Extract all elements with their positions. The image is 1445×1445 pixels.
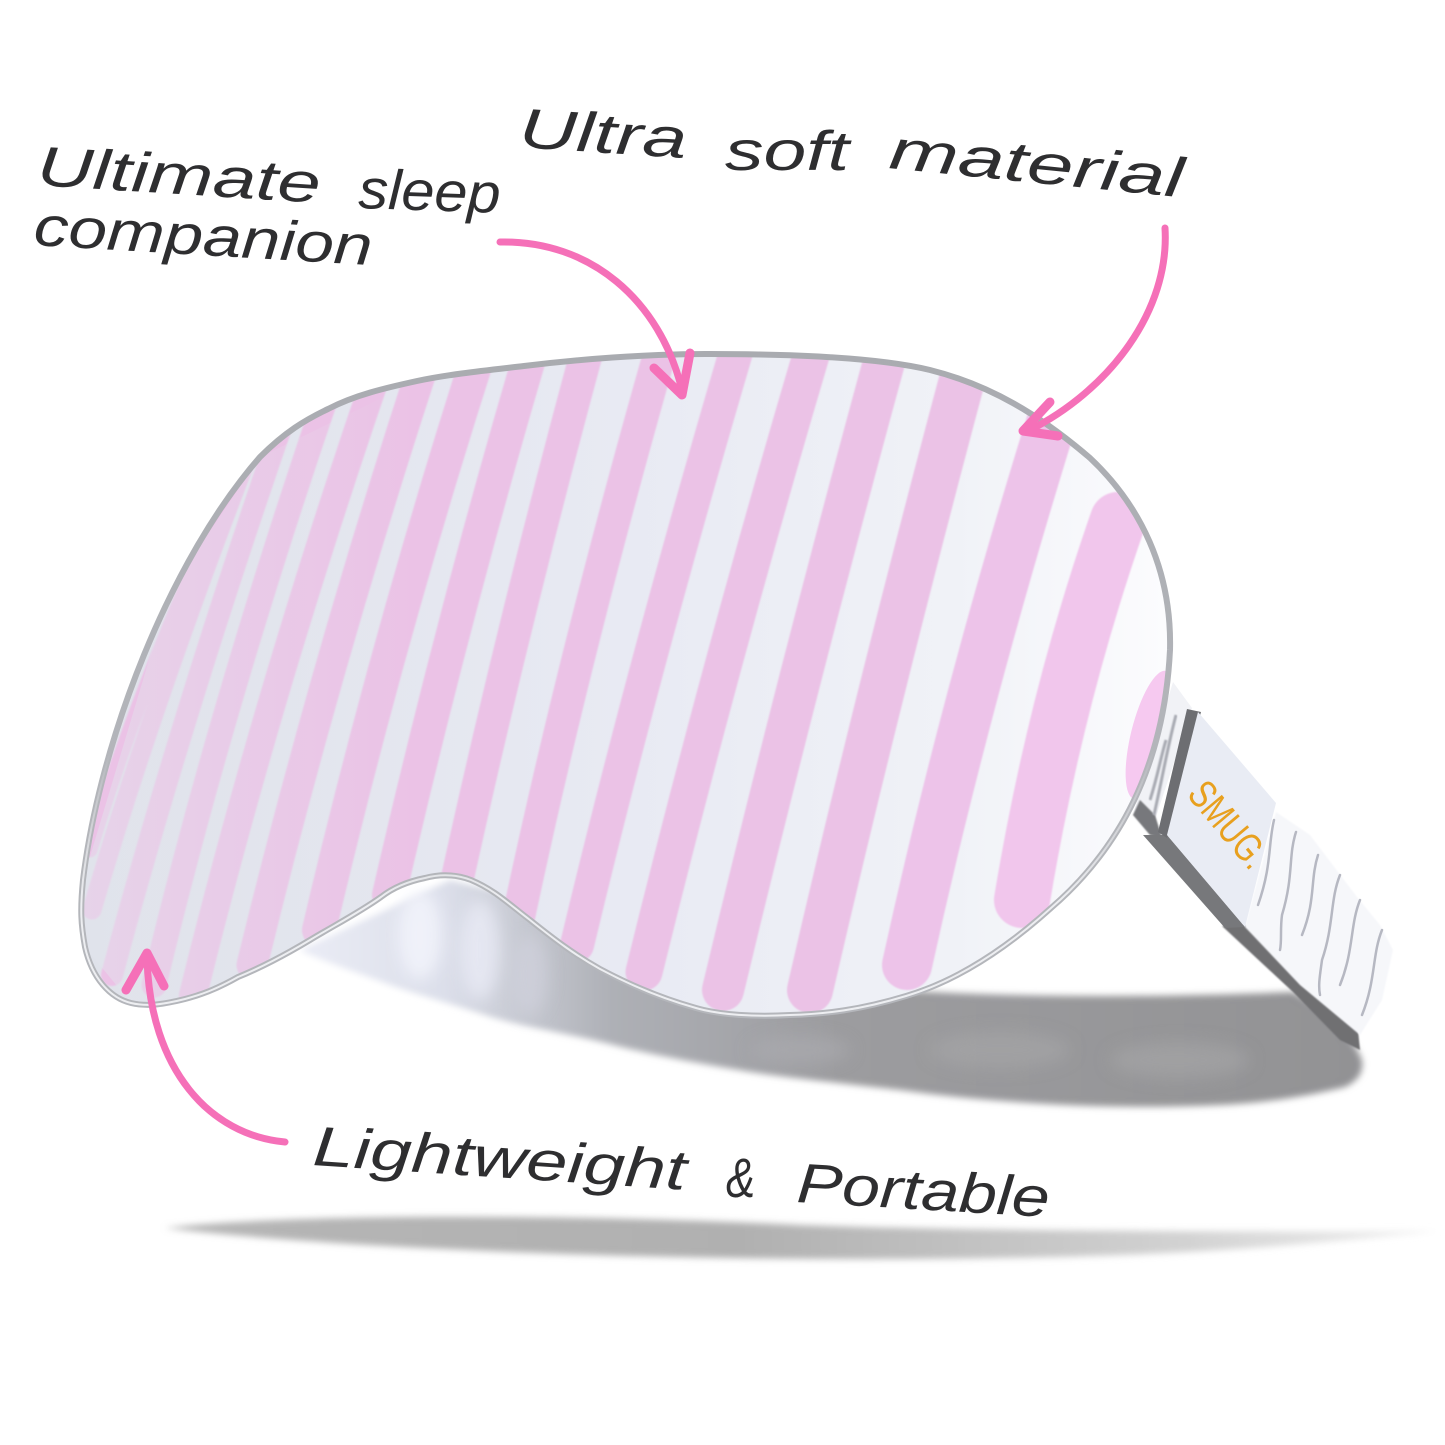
label: ultra soft material: soft xyxy=(725,119,852,182)
label: ultimate sleep companion: companion xyxy=(32,194,374,277)
label: ultimate sleep companion xyxy=(32,134,502,277)
arrow: ultimate sleep companion xyxy=(500,242,690,395)
label: ultra soft material: Ultra xyxy=(517,96,689,170)
left edge fading xyxy=(84,461,262,998)
label: lightweight and portable xyxy=(311,1114,1052,1229)
elastic band xyxy=(1245,812,1393,1035)
elastic strap, right side xyxy=(1133,682,1393,1050)
back of strap and cast shadow xyxy=(300,880,1362,1107)
elastic wrinkles xyxy=(1258,820,1382,1015)
ground shadow xyxy=(165,1217,1440,1259)
silver piping xyxy=(81,354,1170,1016)
pink stripes xyxy=(90,335,1184,995)
brand tag xyxy=(1167,712,1276,927)
mottled patches on the strap shadow xyxy=(398,890,1250,1078)
sleep mask body xyxy=(81,335,1184,1016)
elastic next to mask xyxy=(1133,682,1192,835)
label: lightweight and portable: & xyxy=(726,1146,755,1209)
infographic canvas xyxy=(36,109,1396,1263)
arrow: ultra soft material xyxy=(1023,228,1165,436)
arrow: lightweight and portable xyxy=(126,953,285,1142)
strap underside xyxy=(1222,925,1360,1050)
label: lightweight and portable: Portable xyxy=(795,1151,1052,1229)
strap buckle underside xyxy=(1143,835,1245,928)
label: ultimate sleep companion: Ultimate xyxy=(35,134,323,215)
label: ultimate sleep companion: sleep xyxy=(358,157,502,225)
brand logo: SMUG. xyxy=(1179,773,1277,877)
label: ultra soft material xyxy=(517,96,1189,209)
label: lightweight and portable: Lightweight xyxy=(311,1114,692,1202)
label: ultra soft material: material xyxy=(887,117,1189,209)
